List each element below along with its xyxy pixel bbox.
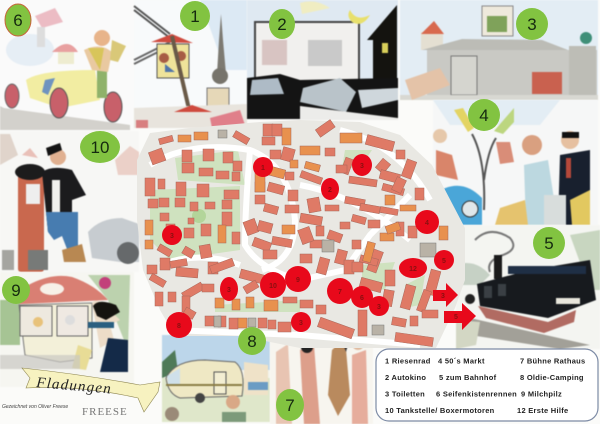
- panel 7: stage band at town hall: [270, 330, 373, 424]
- marker 3 Toiletten east: [369, 296, 389, 316]
- legend: 3 Toiletten: [385, 390, 425, 398]
- caption: artist credit: Gezeichnet von Oliver Freese: [2, 404, 68, 410]
- panel 6: soapbox race car: [0, 0, 133, 130]
- panel 3: garage hall: [400, 0, 598, 100]
- marker 3 Toiletten north: [352, 154, 372, 176]
- marker 8 Camping: [166, 312, 192, 338]
- marker 12 Erste Hilfe: 12: [409, 266, 417, 273]
- marker 5 Bahnhof: 5: [442, 258, 446, 265]
- badge 4: 4: [479, 106, 489, 125]
- marker 1 Riesenrad: [253, 157, 273, 177]
- houses, orange roofs: [145, 128, 448, 328]
- legend: 7 Bühne Rathaus: [520, 356, 585, 366]
- banner: Fladungen: Fladungen: [35, 375, 113, 398]
- badge 8: 8: [247, 332, 257, 351]
- legend: 9 Milchpilz: [521, 390, 562, 398]
- map markers: [162, 154, 454, 338]
- panel 4: 50s market: [433, 100, 598, 225]
- legend: 10 Tankstelle/ Boxermotoren: [385, 406, 495, 415]
- marker 6 Seifenkisten: 6: [360, 295, 364, 302]
- marker 3 Toiletten north: 3: [360, 163, 364, 170]
- badge 7: [276, 389, 304, 421]
- badge 10: 10: [91, 138, 109, 157]
- houses, grey roofs: [214, 130, 436, 335]
- arrow 5 to station: [444, 303, 476, 330]
- badge 3: 3: [527, 15, 537, 34]
- marker 10 Tankstelle: 10: [269, 283, 277, 290]
- marker 1 Riesenrad: 1: [261, 165, 265, 172]
- marker 7 Bühne: [327, 278, 353, 304]
- badge 3: [516, 8, 548, 40]
- panel 2: drive-in cinema: [247, 0, 398, 120]
- green areas: [150, 150, 425, 312]
- badge 1: [180, 1, 210, 31]
- marker 4 Markt: 4: [425, 220, 429, 227]
- marker 3 Toiletten west: 3: [170, 233, 174, 240]
- legend: 1 Riesenrad: [385, 356, 431, 366]
- marker 3 Toiletten centre: 3: [227, 287, 231, 294]
- legend: 6 Seifenkistenrennen: [436, 390, 517, 398]
- marker 7 Bühne: 7: [338, 289, 342, 296]
- marker 2 Autokino: 2: [328, 187, 332, 194]
- arrow 5 to station: 5: [454, 314, 458, 321]
- marker 3 Toiletten centre: [220, 277, 238, 301]
- legend: 2 Autokino: [385, 373, 426, 382]
- badge 6: 6: [13, 11, 23, 30]
- badge 5: [533, 227, 565, 259]
- badge 7: 7: [285, 396, 295, 415]
- badge 4: [468, 99, 500, 131]
- panel 1: Ferris wheel and church: [134, 0, 247, 128]
- badge 6: [5, 4, 31, 36]
- badge 9: 9: [11, 281, 21, 300]
- houses, red roofs: [145, 120, 441, 347]
- panel 5: steam locomotive: [456, 225, 600, 349]
- marker 9 Milchpilz: [285, 266, 311, 292]
- panel 10: petrol pump and scooter: [0, 131, 139, 272]
- marker 10 Tankstelle: [260, 272, 286, 298]
- signature: Freese: FREESE: [82, 406, 128, 418]
- arrow 3 to toilets: [433, 283, 458, 307]
- panel 8: Oldie camping: [162, 335, 270, 422]
- legend: 8 Oldie-Camping: [520, 373, 584, 382]
- badge 5: 5: [544, 234, 554, 253]
- legend: 5 zum Bahnhof: [439, 373, 497, 382]
- badge 1: 1: [190, 7, 200, 26]
- legend: 12 Erste Hilfe: [517, 406, 568, 415]
- badge 8: [238, 327, 266, 355]
- legend: [376, 349, 598, 421]
- marker 3 Toiletten south: 3: [299, 320, 303, 327]
- marker 4 Markt: [415, 210, 439, 234]
- badge 2: 2: [277, 15, 287, 34]
- marker 9 Milchpilz: 9: [296, 277, 300, 284]
- badge 9: [2, 276, 30, 304]
- streets: [150, 130, 430, 345]
- legend: 4 50´s Markt: [438, 356, 485, 366]
- arrow 3 to toilets: 3: [441, 293, 445, 300]
- marker 6 Seifenkisten: [351, 286, 373, 308]
- marker 12 Erste Hilfe: [399, 258, 427, 278]
- map of Fladungen: [137, 120, 476, 348]
- marker 3 Toiletten east: 3: [377, 304, 381, 311]
- marker 5 Bahnhof: [434, 250, 454, 270]
- panel 9: milk mushroom kiosk: [0, 272, 134, 387]
- banner: Fladungen: [22, 368, 160, 412]
- marker 2 Autokino: [321, 178, 339, 200]
- marker 3 Toiletten west: [162, 225, 182, 245]
- marker 3 Toiletten south: [291, 312, 311, 332]
- marker 8 Camping: 8: [177, 323, 181, 330]
- badge 10: [80, 131, 120, 163]
- badge 2: [269, 9, 295, 39]
